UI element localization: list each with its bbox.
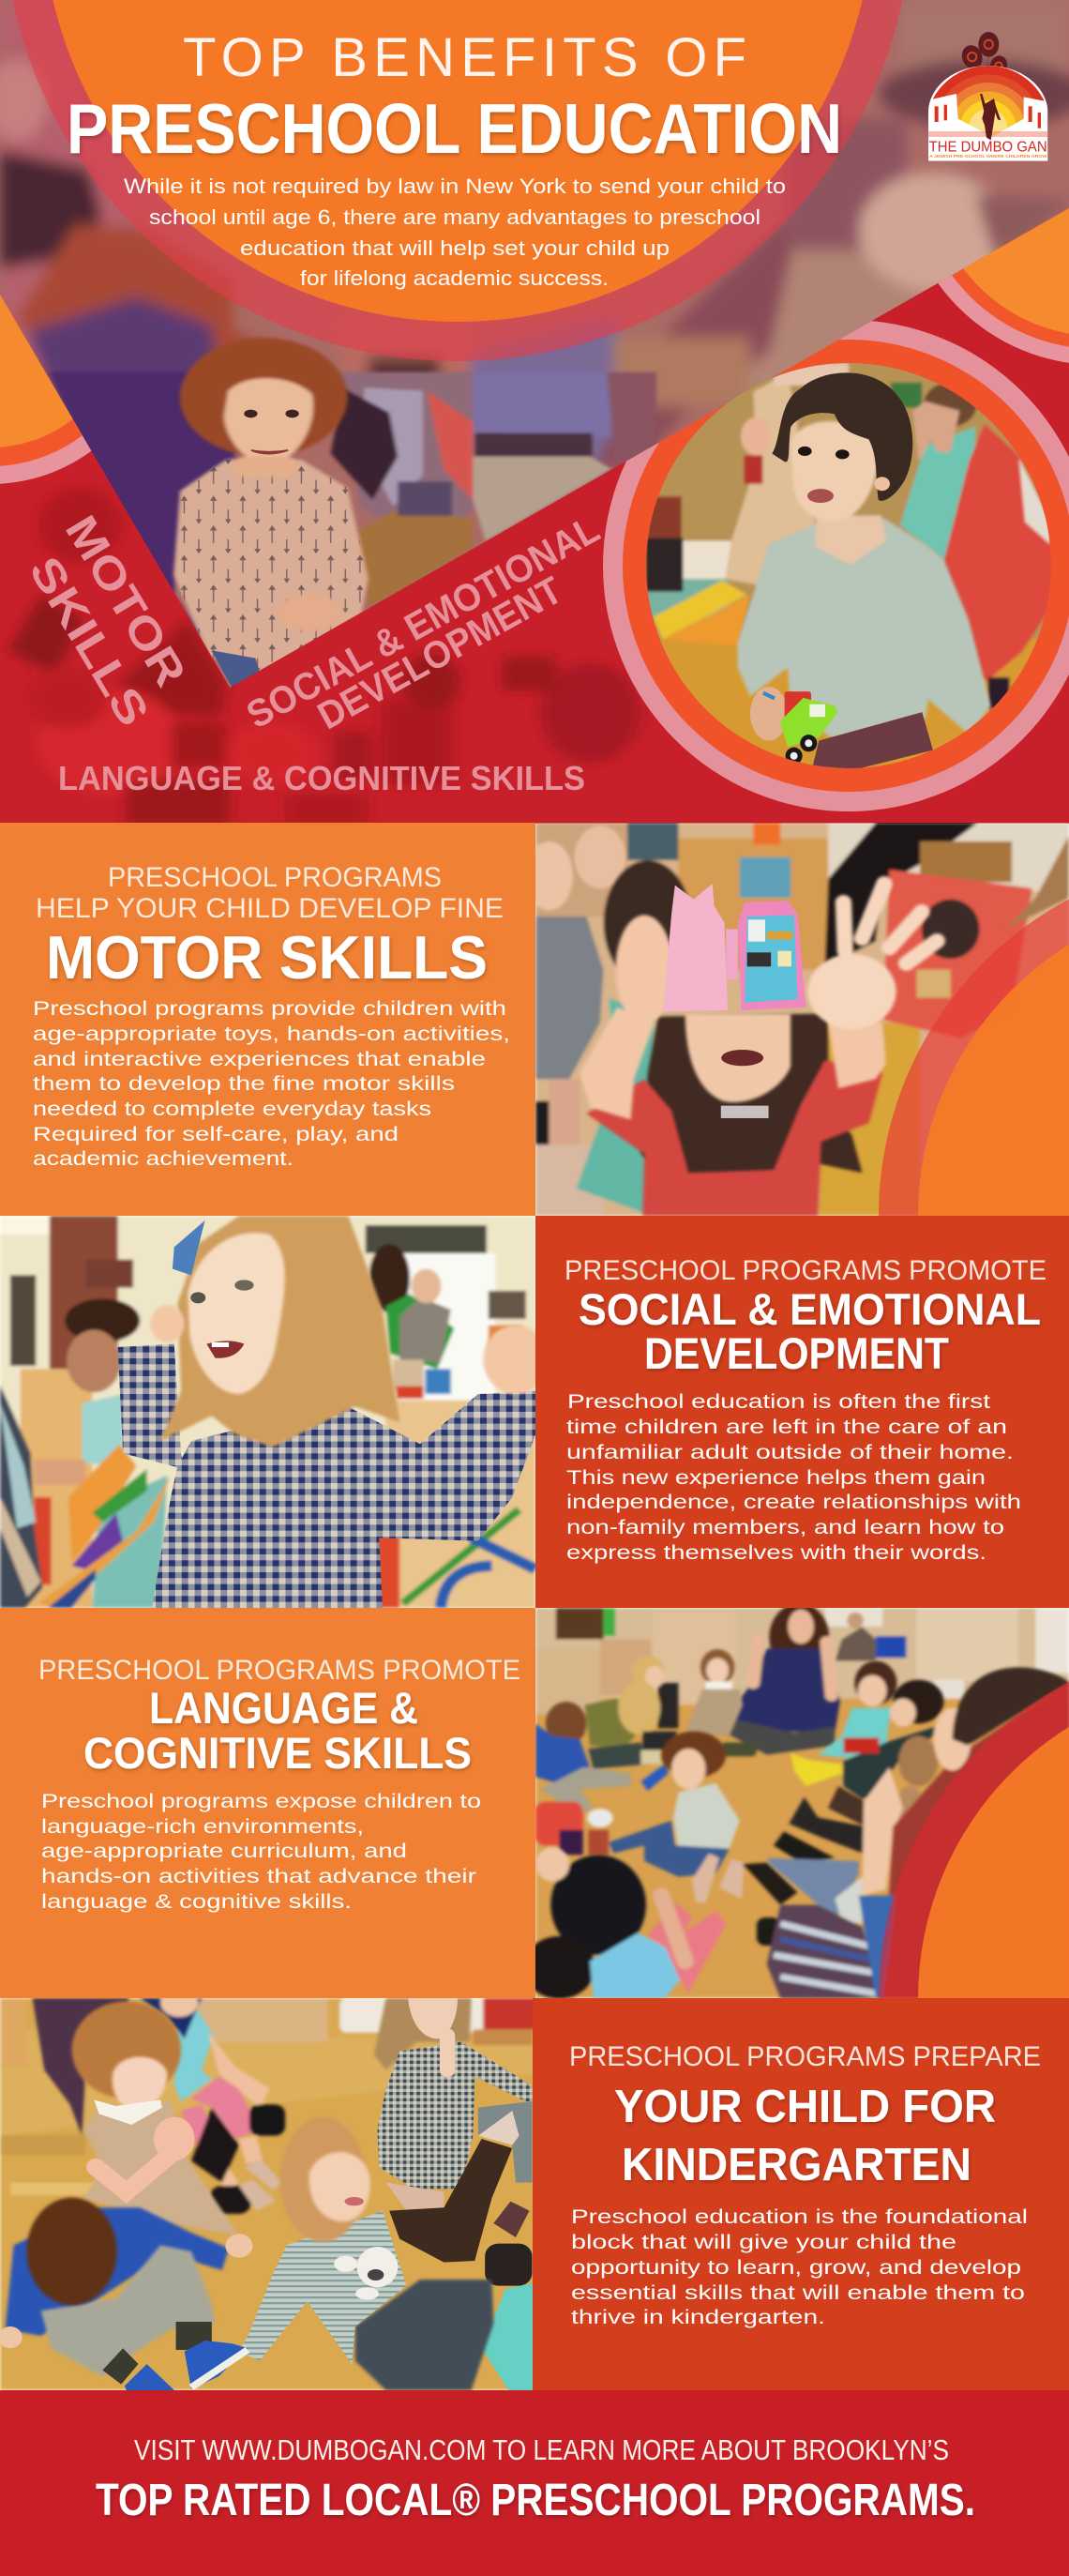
body: language and cognitive — [41, 1791, 481, 1913]
heading: motor skills: HELP YOUR CHILD DEVELOP FINE — [36, 893, 504, 924]
panel: kindergarten text — [533, 1998, 1069, 2390]
hero foreground photo: curly haired child — [51, 338, 656, 688]
label: social and emotional development: DEVELOPMENT — [310, 568, 569, 737]
heading: motor skills: MOTOR SKILLS — [46, 923, 488, 992]
body: social and emotional: express themselves with their words. — [566, 1542, 986, 1564]
body: motor skills: and interactive experiences that enable — [33, 1049, 486, 1070]
girl's raised hands — [150, 1305, 549, 1394]
intro paragraph: school until age 6, there are many advantages to preschool — [149, 205, 760, 229]
body: language and cognitive: hands-on activities that advance their — [41, 1866, 476, 1887]
circular photo: boy with toy tractor — [646, 363, 1051, 768]
body: social and emotional: This new experience helps them gain — [566, 1467, 986, 1489]
heading: language and cognitive skills — [38, 1655, 520, 1778]
body: language and cognitive: language-rich environments, — [41, 1816, 364, 1838]
child's shirt with arrow print — [173, 460, 369, 688]
girl's face and mouth — [685, 1013, 790, 1118]
panel: footer call to action — [0, 2390, 1069, 2576]
intro paragraph: for lifelong academic success. — [300, 266, 609, 290]
heading: motor skills — [36, 862, 504, 992]
curly haired girl in beige dress — [71, 2001, 239, 2235]
children on the left — [535, 1649, 743, 1855]
logo child silhouette — [980, 94, 1001, 140]
body: kindergarten: essential skills that will enable them to — [571, 2282, 1025, 2304]
left corner circle — [0, 295, 92, 484]
body: language and cognitive: Preschool programs expose children to — [41, 1791, 481, 1812]
label: motor skills: MOTOR — [56, 507, 196, 694]
body: motor skills — [33, 998, 510, 1170]
body: motor skills: academic achievement. — [33, 1148, 294, 1170]
photo: children on wooden floor — [0, 1989, 535, 2390]
girl's red shirt — [586, 1060, 882, 1216]
heading: language and cognitive skills: LANGUAGE & — [149, 1683, 418, 1733]
panel: motor skills text — [0, 823, 535, 1216]
body: social and emotional — [566, 1391, 1021, 1564]
body: kindergarten — [571, 2206, 1028, 2328]
body: kindergarten: block that will give your child the — [571, 2232, 956, 2253]
boy's face and hair — [772, 372, 912, 565]
heading: social and emotional development — [565, 1255, 1046, 1378]
photo: girl holding toy fridge — [525, 823, 1069, 1574]
body: language and cognitive: age-appropriate curriculum, and — [41, 1841, 407, 1862]
girl's face — [173, 1220, 285, 1394]
label: language and cognitive skills: LANGUAGE & COGNITIVE SKILLS — [58, 759, 585, 797]
decorative circle overlay — [879, 857, 1069, 1574]
heading: social and emotional development: DEVELOPMENT — [644, 1328, 949, 1378]
logo balloons — [962, 32, 1007, 68]
boy's shirt — [738, 519, 991, 737]
heading: social and emotional development: SOCIAL & EMOTIONAL — [579, 1284, 1041, 1334]
title: PRESCHOOL EDUCATION — [67, 89, 842, 168]
boy in blue from behind — [0, 2198, 253, 2390]
standing girl in check dress and boots — [374, 1998, 535, 2390]
body: kindergarten: thrive in kindergarten. — [571, 2307, 825, 2328]
intro paragraph: While it is not required by law in New York to send your child to — [124, 174, 786, 198]
curly haired child in centre — [588, 1732, 745, 1903]
photo: blonde girl in gingham shirt — [0, 1216, 549, 1608]
body: social and emotional: independence, create relationships with — [566, 1492, 1021, 1513]
panel: language and cognitive text — [0, 1608, 535, 1998]
hero background photo: muted classroom — [0, 0, 1069, 469]
teacher — [721, 1603, 840, 1756]
logo rainbow arch — [928, 66, 1048, 161]
intro paragraph: education that will help set your child up — [240, 236, 670, 260]
footer line: visit website: VISIT WWW.DUMBOGAN.COM TO LEARN MORE ABOUT BROOKLYN’S — [134, 2433, 949, 2466]
boy's hand — [750, 687, 788, 741]
heading: language and cognitive skills: PRESCHOOL PROGRAMS PROMOTE — [38, 1655, 520, 1686]
body: social and emotional: time children are left in the care of an — [566, 1417, 1007, 1438]
children on the right — [743, 1661, 1069, 1998]
heading: language and cognitive skills: COGNITIVE SKILLS — [83, 1728, 472, 1778]
girl in teal and pink — [140, 1989, 285, 2214]
body: social and emotional: unfamiliar adult outside of their home. — [566, 1442, 1014, 1463]
body: kindergarten: opportunity to learn, grow, and develop — [571, 2257, 1021, 2279]
label: motor skills — [33, 514, 183, 724]
girl's hair — [640, 1013, 862, 1182]
heading: motor skills: PRESCHOOL PROGRAMS — [108, 862, 442, 893]
girl's gingham shirt — [118, 1344, 535, 1608]
skull print — [334, 2247, 398, 2300]
body: social and emotional: Preschool education is often the first — [567, 1391, 990, 1413]
title — [69, 38, 840, 158]
body: motor skills: age-appropriate toys, hands-on activities, — [33, 1023, 510, 1045]
girl in striped skull shirt — [239, 2117, 493, 2390]
toy fridge — [663, 884, 806, 1012]
heading: kindergarten — [569, 2041, 1041, 2190]
body: motor skills: them to develop the fine motor skills — [33, 1073, 455, 1095]
photo: children sitting in a circle with teacher — [523, 1603, 1069, 2356]
child's curly hair and face — [180, 338, 348, 477]
logo tagline: A JEWISH PRE-SCHOOL WHERE CHILDREN GROW — [929, 154, 1047, 159]
circular ring frame — [603, 320, 1069, 811]
child in light blue from behind — [523, 1847, 726, 1999]
panel: social and emotional text — [535, 1216, 1069, 1608]
body: language and cognitive: language & cognitive skills. — [41, 1891, 352, 1913]
hero rotated labels — [20, 507, 607, 797]
body: social and emotional: non-family members, and learn how to — [566, 1517, 1004, 1538]
red lower diagonal field — [0, 208, 1069, 826]
decorative circle overlay — [879, 1640, 1069, 2356]
panel: hero header — [0, 0, 1069, 826]
child behind with colourful dress — [33, 1998, 129, 2136]
girl's blonde hair — [160, 1216, 399, 1447]
body: motor skills: Preschool programs provide children with — [33, 998, 506, 1020]
body: motor skills: Required for self-care, play, and — [33, 1124, 399, 1145]
orange circle — [42, 0, 873, 322]
logo wordmark: THE DUMBO GAN — [929, 139, 1047, 155]
heading: kindergarten: PRESCHOOL PROGRAMS PREPARE — [569, 2041, 1041, 2072]
translucent outer ring — [3, 0, 912, 361]
label: motor skills: SKILLS — [20, 548, 159, 735]
title: TOP BENEFITS OF — [183, 27, 746, 88]
toy tractor — [762, 691, 837, 765]
label: social and emotional development: SOCIAL & EMOTIONAL — [239, 508, 607, 736]
body: motor skills: needed to complete everyday tasks — [33, 1099, 431, 1120]
girl's arms and hands — [580, 884, 937, 1120]
heading: kindergarten: KINDERGARTEN — [622, 2140, 971, 2190]
logo: The Dumbo Gan — [928, 32, 1048, 161]
body: kindergarten: Preschool education is the foundational — [571, 2206, 1028, 2228]
boy's trousers — [813, 712, 933, 769]
intro paragraph — [124, 174, 786, 290]
heading: kindergarten: YOUR CHILD FOR — [614, 2082, 996, 2132]
heading: social and emotional development: PRESCHOOL PROGRAMS PROMOTE — [565, 1255, 1046, 1286]
right corner circle — [938, 208, 1069, 363]
